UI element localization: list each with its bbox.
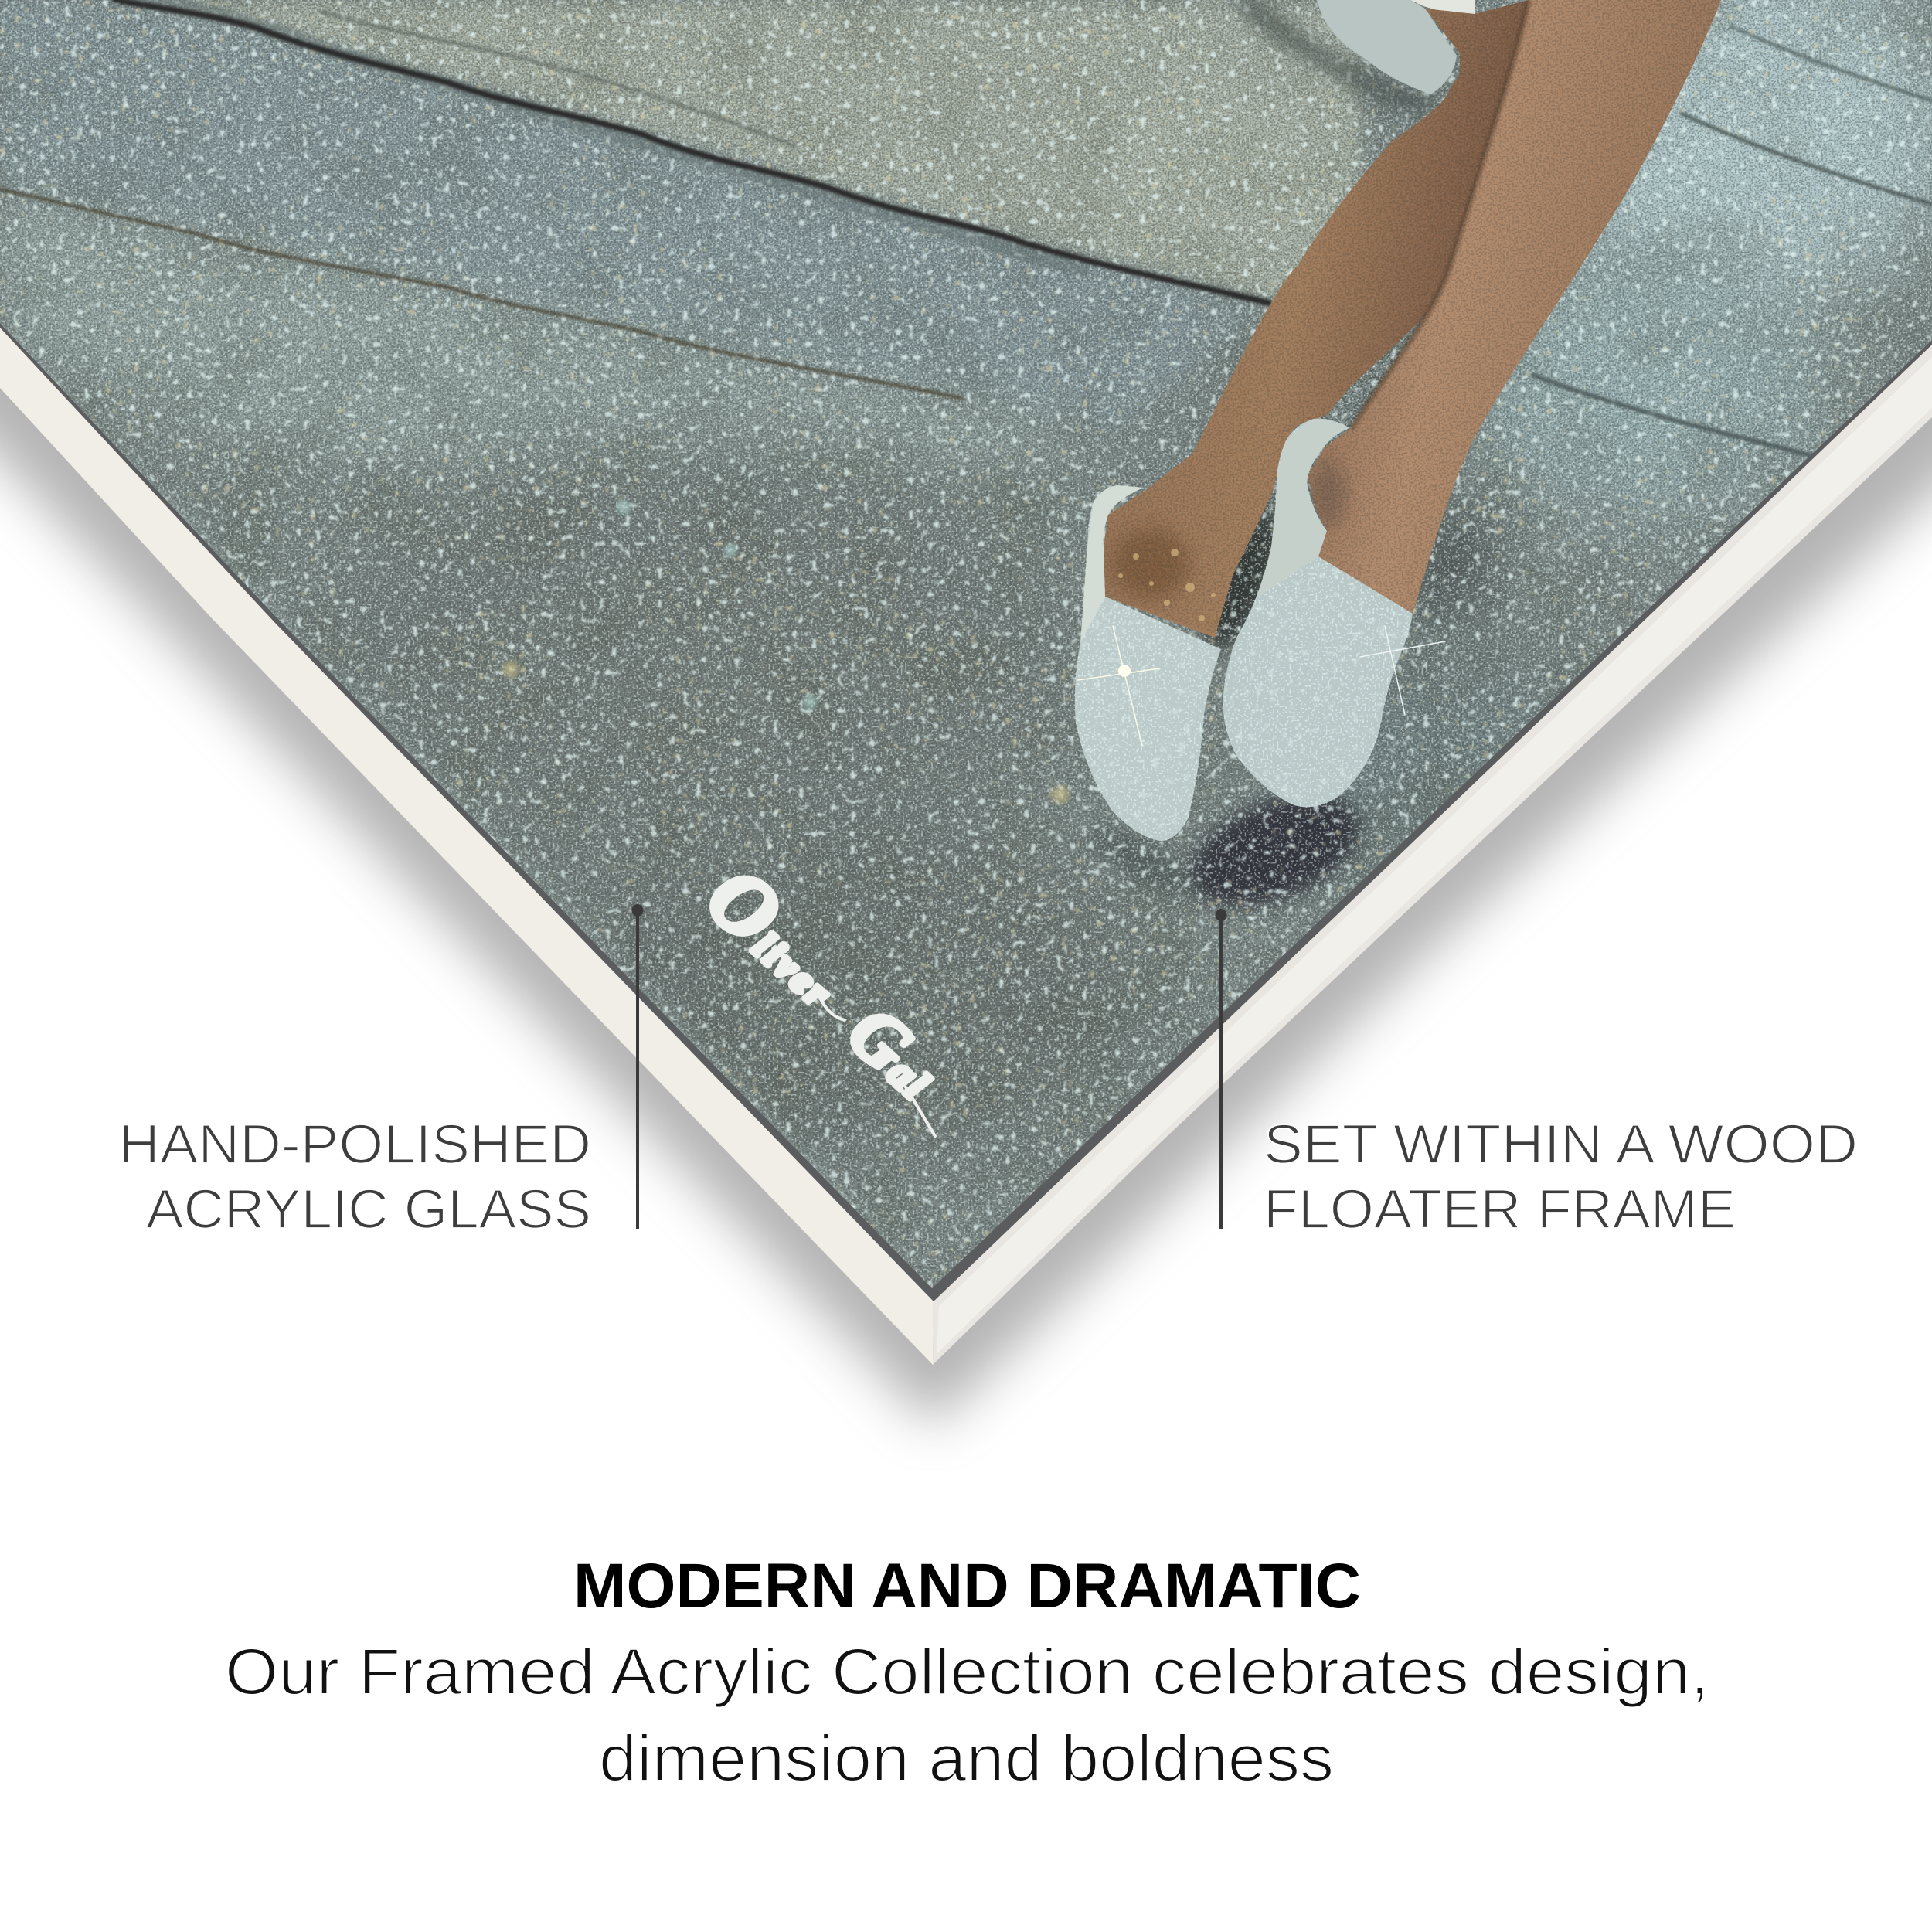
- leader line: frame: [1215, 909, 1227, 1229]
- frame: right arm: [933, 340, 1932, 1365]
- star flare on right slipper: [1360, 626, 1445, 715]
- star flare on left slipper: [1078, 626, 1159, 746]
- canvas blotches: [0, 0, 1932, 1314]
- leg: back: [1104, 0, 1529, 638]
- caption: frame: [1264, 1114, 1858, 1240]
- frame: acrylic edge: [0, 323, 1932, 1301]
- shadow beneath the slippers: [1082, 487, 1515, 928]
- white floater frame: [0, 323, 1932, 1365]
- description text: Our Framed Acrylic Collection celebrates design,: [225, 1635, 1709, 1708]
- tonal regions: [0, 0, 1932, 1275]
- signature: first name: Oliver: [689, 849, 869, 1025]
- signature: tail: [817, 989, 935, 1136]
- frame drop shadow: [0, 232, 1932, 1426]
- leg: front: [1308, 0, 1721, 614]
- callout: hand-polished acrylic glass: [118, 904, 643, 1240]
- heading: MODERN AND DRAMATIC: [573, 1551, 1361, 1621]
- gold glitter on left foot: [1118, 549, 1216, 621]
- frame: right arm highlight: [937, 357, 1932, 1354]
- caption: acrylic: HAND-POLISHED: [118, 1114, 591, 1175]
- canvas base tone: [0, 0, 1932, 1314]
- signature: surname: Gal: [833, 990, 958, 1114]
- description text: dimension and boldness: [599, 1722, 1334, 1794]
- caption: acrylic: [118, 1114, 591, 1240]
- right slipper: [1217, 413, 1418, 815]
- description text: [225, 1635, 1709, 1794]
- glitter on canvas: [0, 0, 1932, 1314]
- artwork canvas: [0, 0, 1932, 1314]
- leg texture and highlights: [1082, 0, 1739, 657]
- left slipper: [1066, 479, 1236, 850]
- artist signature: [689, 849, 958, 1136]
- caption: frame: SET WITHIN A WOOD: [1264, 1114, 1858, 1175]
- caption: acrylic: ACRYLIC GLASS: [146, 1179, 591, 1240]
- frame: left arm: [0, 323, 934, 1365]
- pavement creases: [0, 0, 1932, 456]
- caption: frame: FLOATER FRAME: [1264, 1179, 1736, 1240]
- leader line: acrylic: [632, 904, 643, 1229]
- upper slipper and towel hem: [1243, 0, 1475, 104]
- callout: wood floater frame: [1215, 909, 1858, 1240]
- larger glints: [499, 497, 1073, 807]
